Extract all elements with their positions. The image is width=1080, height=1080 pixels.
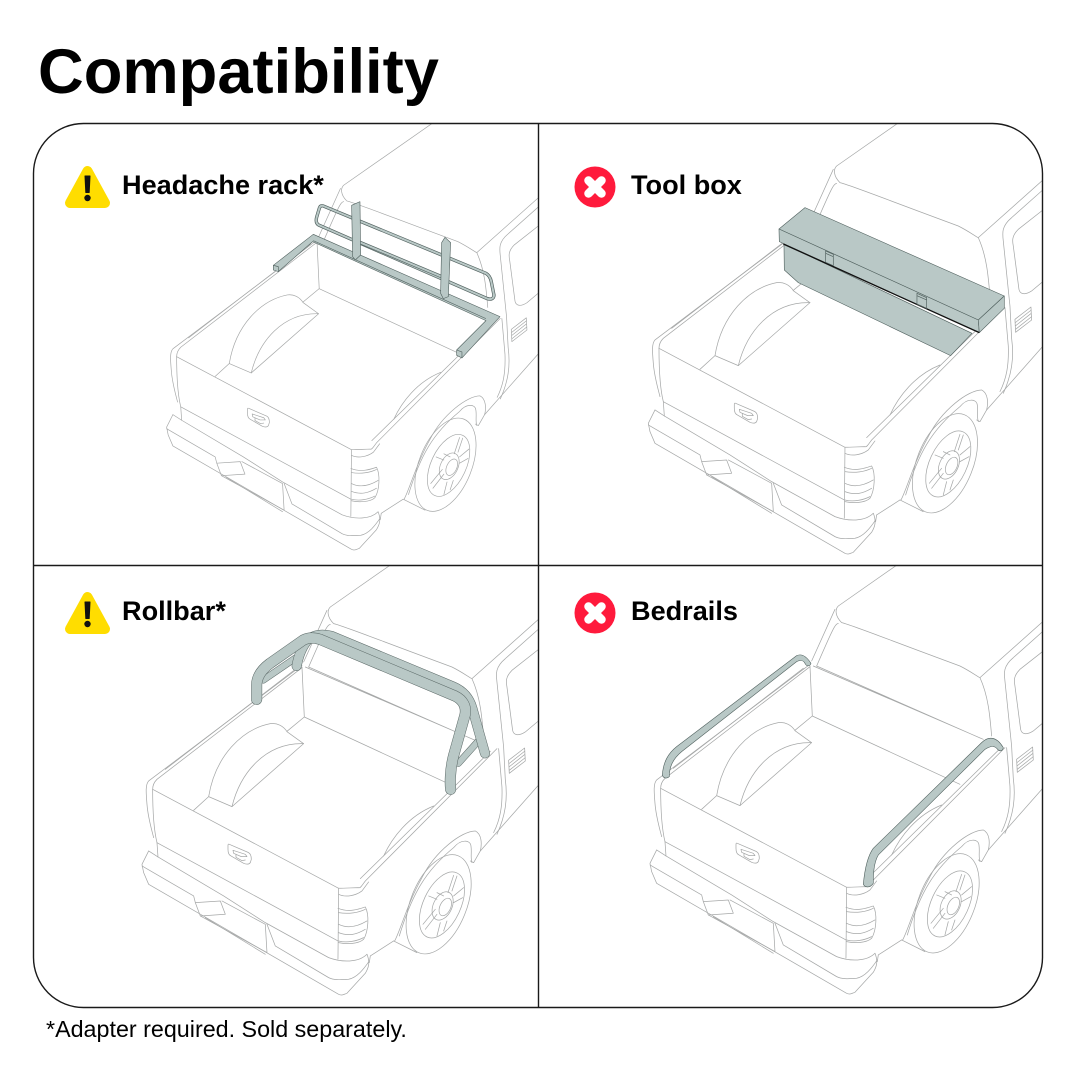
icon: warning triangle [70, 171, 105, 203]
heading: Bedrails: Bedrails [631, 595, 738, 626]
grid frame [34, 124, 1042, 1008]
icon: warning triangle [70, 597, 105, 629]
heading: Rollbar: Rollbar* [122, 595, 226, 626]
headache rack accessory [273, 202, 500, 358]
bedrails accessory [662, 655, 1003, 887]
footnote: *Adapter required. Sold separately. [46, 1016, 407, 1042]
heading: Headache rack: Headache rack* [122, 169, 324, 200]
truck line drawing: rollbar panel [142, 566, 538, 996]
title: Compatibility [38, 37, 439, 107]
panel: tool box [574, 124, 1042, 554]
truck line drawing: tool box panel [648, 124, 1042, 554]
panel: bedrails [574, 566, 1042, 994]
truck line drawing: bedrails panel [650, 566, 1042, 994]
heading: Tool box: Tool box [631, 169, 742, 200]
tool box accessory [779, 208, 1004, 356]
icon: red cross [574, 592, 616, 634]
panel: rollbar [65, 566, 538, 996]
truck line drawing: headache rack panel [166, 124, 538, 550]
rollbar accessory [257, 635, 485, 789]
panel: headache rack [65, 124, 538, 550]
icon: red cross [574, 166, 616, 208]
